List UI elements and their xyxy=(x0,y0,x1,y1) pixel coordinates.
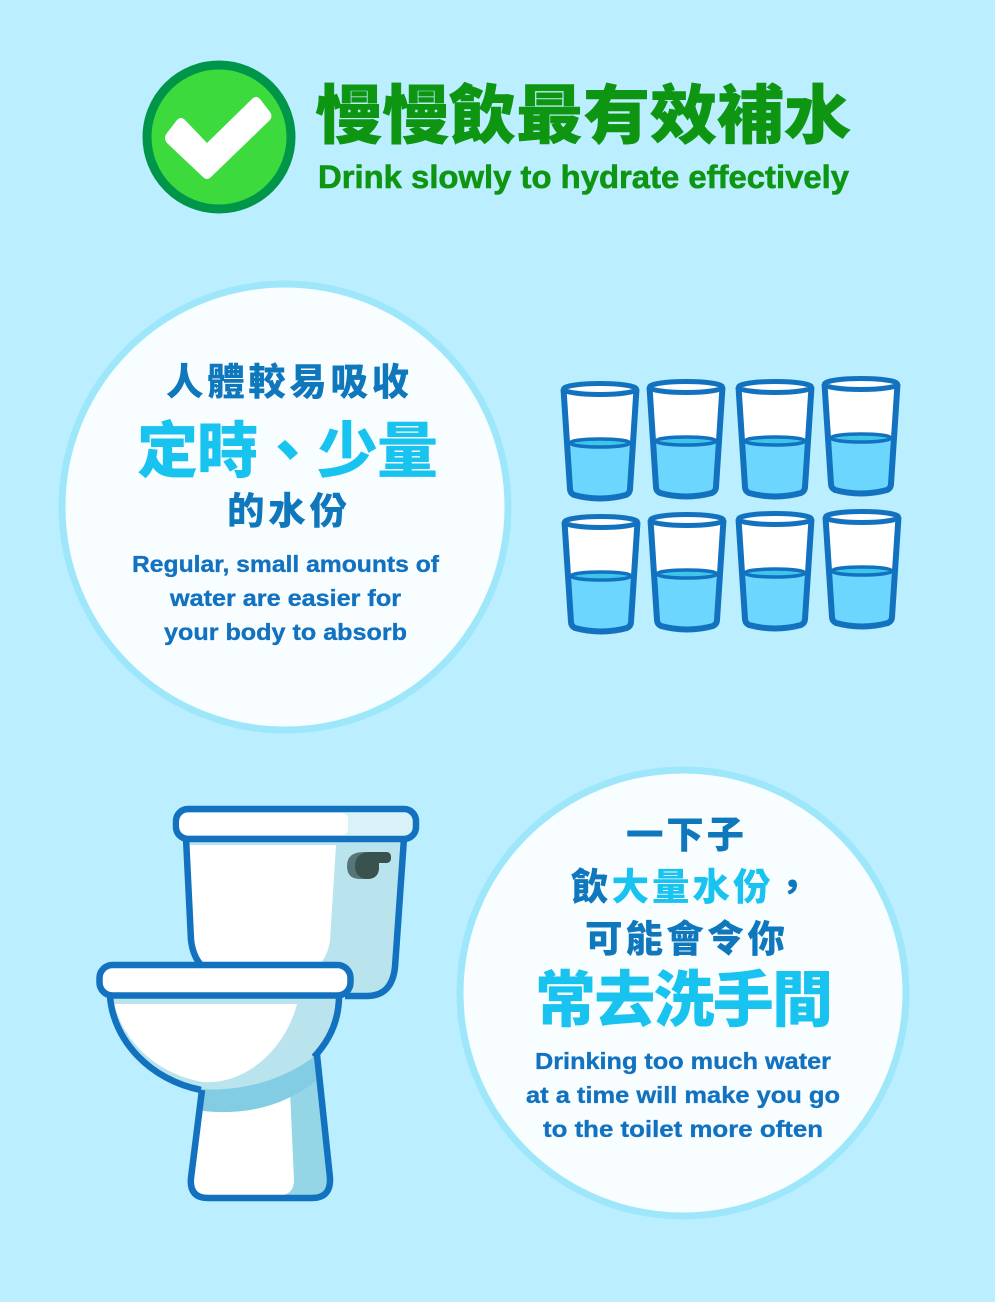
toilet bowl xyxy=(100,965,350,1090)
heading line: 的水份: 的水份 xyxy=(227,480,348,535)
English description: water are easier for xyxy=(169,585,401,611)
heading line: 人體較易吸收: 人體較易吸收 xyxy=(166,351,409,406)
icon: green check mark xyxy=(147,65,291,209)
heading highlight: 定時、少量: 定時、少量 xyxy=(137,401,438,490)
toilet base xyxy=(191,1055,330,1198)
title xyxy=(315,65,851,195)
heading line: 一下子: 一下子 xyxy=(626,804,744,859)
English description: at a time will make you go xyxy=(526,1082,840,1108)
heading line: 可能會令你: 可能會令你 xyxy=(585,908,785,963)
English description xyxy=(132,551,439,645)
English description: Regular, small amounts of xyxy=(132,551,439,577)
English description: your body to absorb xyxy=(164,619,407,645)
icon: toilet xyxy=(100,809,416,1198)
heading line: 飲大量水份: 飲大量水份， xyxy=(571,856,811,911)
title: 慢慢飲最有效補水 xyxy=(315,65,851,157)
heading highlight: 常去洗手間: 常去洗手間 xyxy=(535,950,833,1039)
panel: drinking too much xyxy=(460,770,906,1216)
icon: eight glasses of water xyxy=(563,378,899,632)
English description xyxy=(526,1048,840,1142)
toilet tank xyxy=(176,809,416,996)
panel: regular small amounts xyxy=(62,284,508,730)
English description: Drinking too much water xyxy=(535,1048,831,1074)
English description: to the toilet more often xyxy=(543,1116,823,1142)
subtitle: Drink slowly to hydrate effectively xyxy=(318,159,849,195)
